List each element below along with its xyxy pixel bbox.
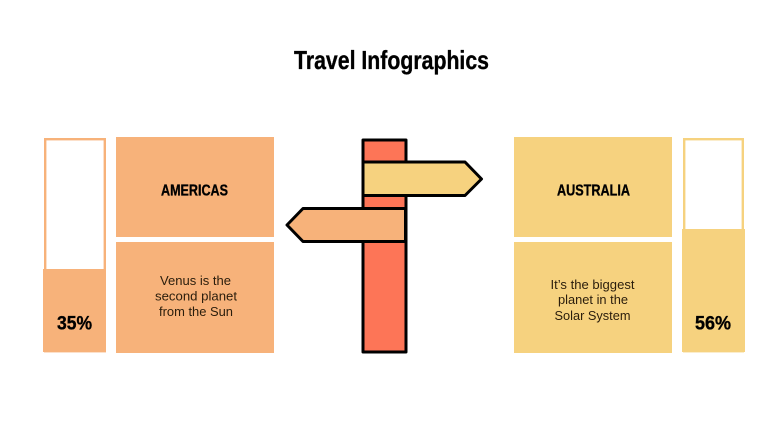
text: americas description: second planet (155, 288, 237, 304)
panel: australia description (514, 242, 672, 353)
gauge fill: 56% (682, 229, 745, 352)
panel: americas description (116, 242, 274, 353)
signpost pole (363, 140, 406, 352)
value: 56%: 56% (695, 312, 731, 334)
panel: australia gauge (682, 139, 745, 352)
text: australia description: planet in the (558, 292, 628, 307)
text: americas description: from the Sun (159, 304, 233, 319)
panel: americas heading (116, 137, 274, 237)
text: australia description: It’s the biggest (550, 277, 635, 292)
text: australia description: Solar System (554, 308, 630, 323)
panel: americas gauge (43, 139, 106, 352)
heading: americas: AMERICAS (161, 182, 228, 200)
text: americas description: Venus is the (160, 273, 231, 288)
title: Travel Infographics (294, 45, 489, 75)
value: 35%: 35% (57, 312, 92, 334)
arrow sign: right (363, 162, 482, 196)
gauge fill: 35% (43, 269, 106, 352)
panel: australia heading (514, 137, 672, 237)
icon: signpost (287, 140, 482, 352)
heading: australia: AUSTRALIA (557, 182, 630, 200)
arrow sign: left (287, 208, 406, 242)
